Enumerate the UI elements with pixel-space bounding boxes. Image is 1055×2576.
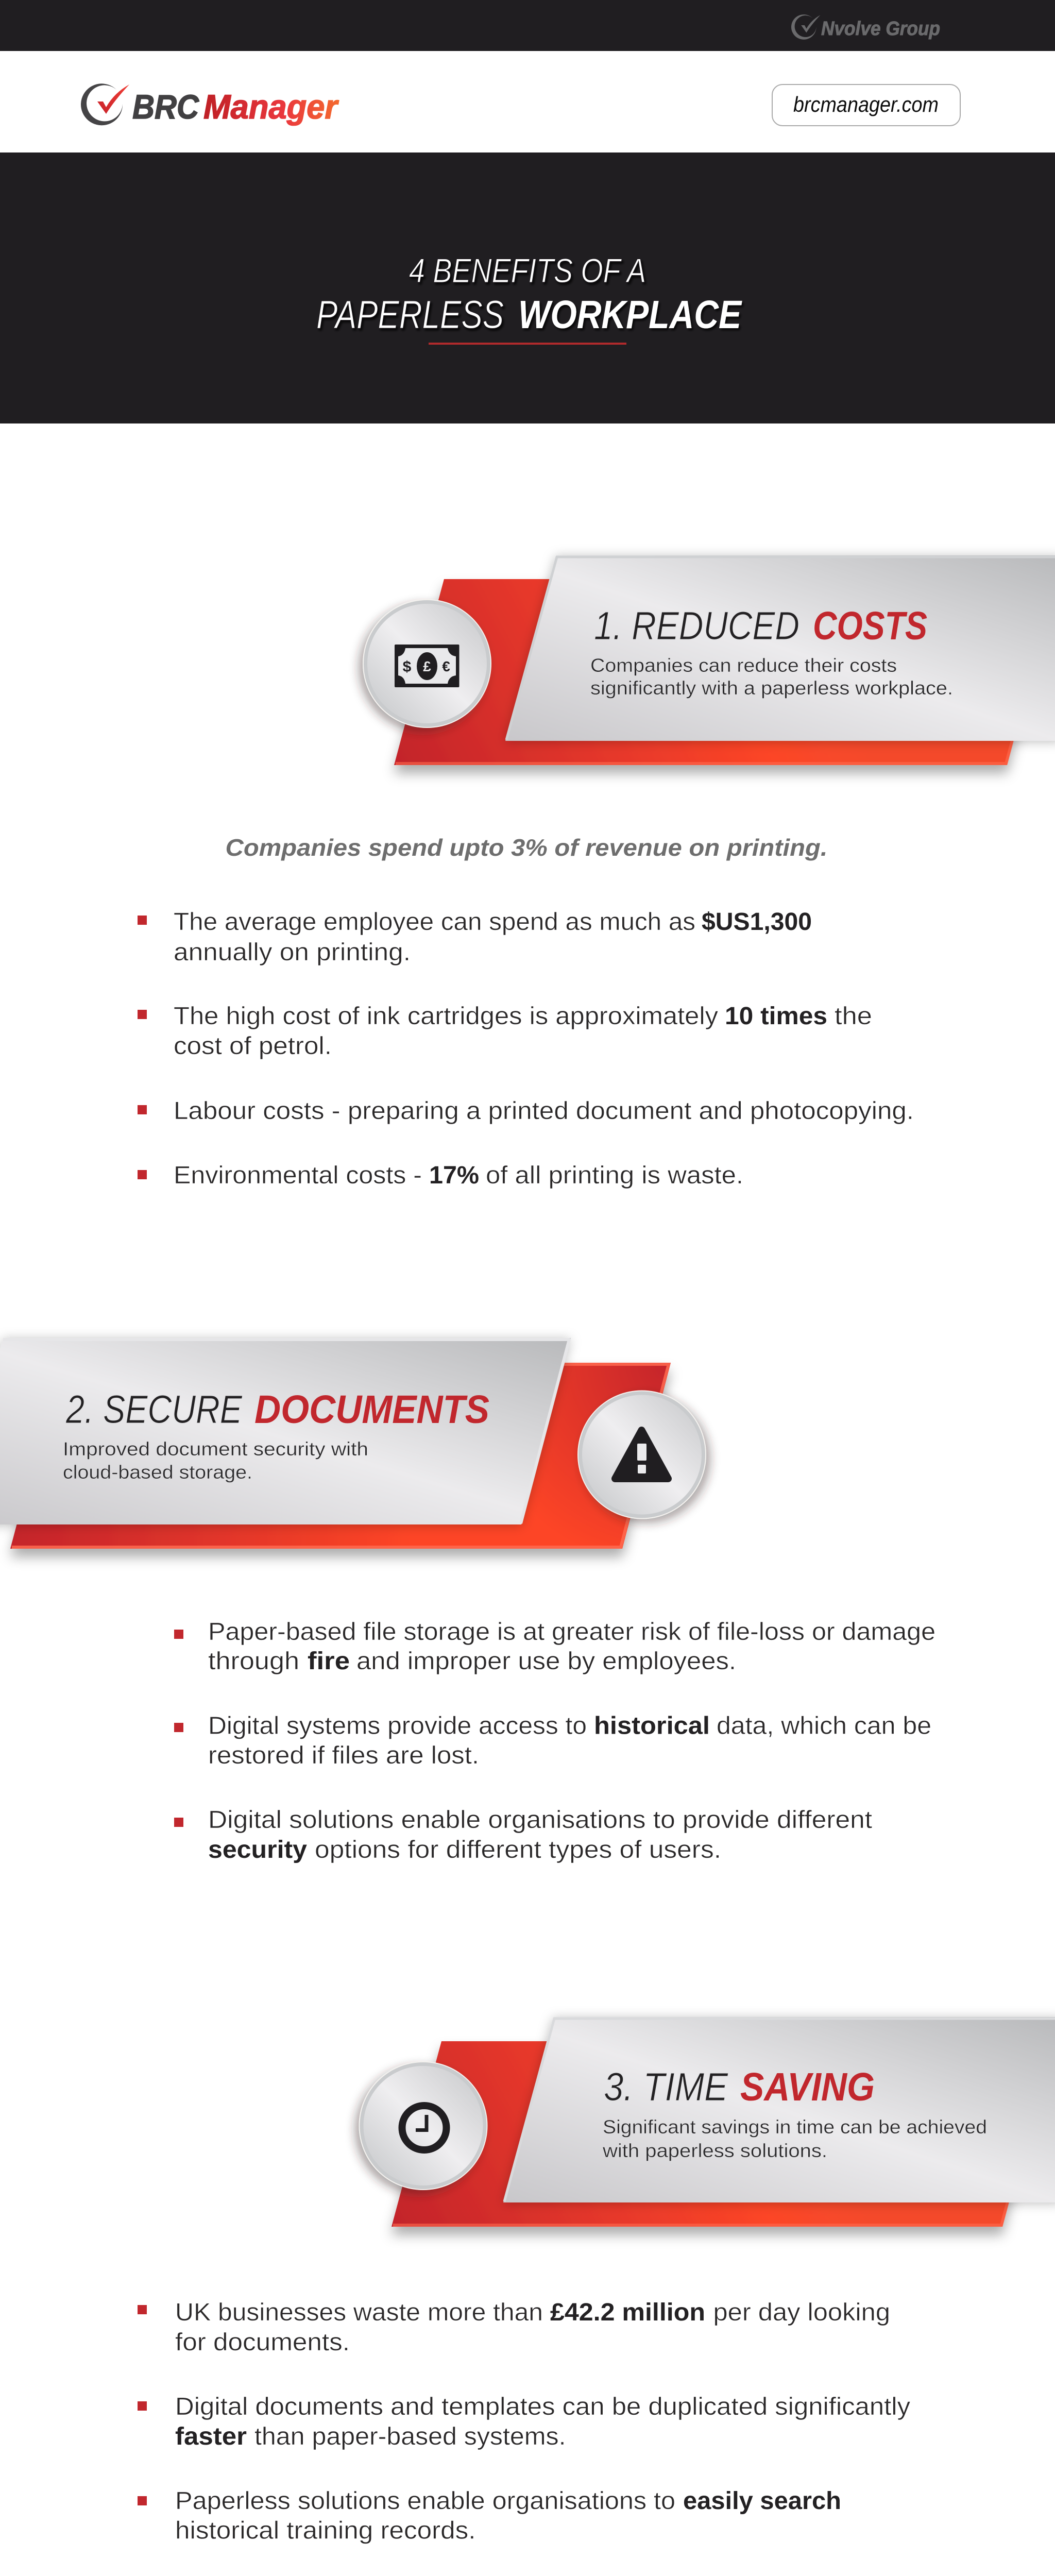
heading 3 (604, 2065, 875, 2109)
logo: BRC Manager: Manager (203, 88, 339, 126)
bullet list 3: than paper-based systems. (254, 2423, 566, 2450)
subtitle 1 (590, 655, 953, 699)
logo: BRC Manager: BRC (132, 88, 199, 126)
bullet list 3: easily search (683, 2487, 841, 2515)
bullet list 1 (138, 908, 914, 1189)
bullet list 1: of all printing is waste. (486, 1162, 743, 1189)
bullet list 1: 10 times (725, 1003, 827, 1030)
bullet list 3: Paperless solutions enable organisations to (175, 2487, 675, 2515)
logo: Nvolve Group: Nvolve Group (821, 18, 940, 40)
website button: brcmanager.com (793, 92, 939, 116)
icon: clock (359, 2061, 487, 2190)
subtitle 3: with paperless solutions. (602, 2140, 827, 2161)
banner 1 (394, 555, 1055, 765)
icon: banknote (363, 599, 491, 728)
section 3: time saving (138, 2017, 1055, 2544)
heading 2: 2. SECURE (65, 1387, 243, 1432)
icon: warning triangle (577, 1390, 706, 1519)
bullet list 1: Environmental costs - (174, 1162, 422, 1189)
bullet list 1: $US1,300 (702, 908, 812, 936)
bullet list 2: fire (308, 1648, 350, 1675)
logo: BRC Manager (81, 83, 339, 126)
bullet list 2: restored if files are lost. (208, 1742, 479, 1769)
bullet list 2: through (208, 1648, 299, 1675)
icon: banknote: $ (403, 658, 412, 675)
hero title: PAPERLESS (316, 293, 504, 337)
bullet list 3: historical training records. (175, 2517, 476, 2544)
heading 2 (65, 1387, 489, 1432)
bullet list 3: per day looking (713, 2299, 890, 2326)
icon: banknote: £ (423, 658, 431, 674)
bullet list 2: Paper-based file storage is at greater risk of file-loss or damage (208, 1618, 935, 1646)
top header bar (0, 0, 1055, 51)
bullet list 3: for documents. (175, 2329, 350, 2356)
banner 3 (392, 2017, 1055, 2227)
bullet list 3 (138, 2299, 910, 2544)
subtitle 1: Companies can reduce their costs (590, 655, 897, 676)
subtitle 3: Significant savings in time can be achieved (603, 2116, 987, 2138)
bullet list 1: 17% (429, 1162, 479, 1189)
bullet list 2: and improper use by employees. (356, 1648, 736, 1675)
bullet list 1: The average employee can spend as much as (174, 908, 695, 936)
bullet list 2: historical (594, 1713, 710, 1739)
bullet list 3: faster (175, 2423, 247, 2450)
heading 1: COSTS (813, 604, 927, 648)
bullet list 1: the (835, 1003, 872, 1030)
subtitle 2: Improved document security with (63, 1438, 368, 1460)
hero title: 4 BENEFITS OF A (409, 251, 646, 290)
subtitle 2: cloud-based storage. (63, 1462, 252, 1483)
bullet list 1: annually on printing. (174, 939, 411, 966)
icon: banknote: € (442, 658, 450, 674)
section 2: secure documents (0, 1338, 935, 1863)
callout statistic: Companies spend upto 3% of revenue on printing. (226, 834, 827, 861)
bullet list 2: security (208, 1836, 307, 1863)
hero panel (0, 152, 1055, 423)
bullet list 2 (174, 1618, 935, 1863)
subtitle 3 (602, 2116, 987, 2161)
bullet list 3: Digital documents and templates can be duplicated significantly (175, 2393, 910, 2420)
website button (772, 84, 960, 126)
bullet list 1: Labour costs - preparing a printed document and photocopying. (174, 1097, 914, 1125)
heading 2: DOCUMENTS (254, 1387, 489, 1432)
subtitle 2 (63, 1438, 368, 1483)
heading 3: SAVING (740, 2065, 875, 2109)
bullet list 2: options for different types of users. (315, 1836, 721, 1863)
bullet list 2: data, which can be (717, 1713, 931, 1739)
bullet list 3: £42.2 million (550, 2299, 705, 2326)
hero title: WORKPLACE (518, 293, 742, 337)
hero title (316, 251, 742, 337)
heading 1: 1. REDUCED (594, 604, 799, 648)
bullet list 1: The high cost of ink cartridges is approximately (174, 1003, 718, 1030)
subtitle 1: significantly with a paperless workplace. (590, 677, 953, 699)
logo: Nvolve Group (791, 14, 940, 40)
heading 3: 3. TIME (604, 2065, 728, 2109)
bullet list 1: cost of petrol. (174, 1032, 332, 1060)
bullet list 2: Digital solutions enable organisations to provide different (208, 1806, 872, 1834)
section 1: reduced costs (138, 555, 1055, 1189)
bullet list 3: UK businesses waste more than (175, 2299, 543, 2326)
bullet list 2: Digital systems provide access to (208, 1713, 587, 1739)
banner 2 (0, 1338, 671, 1549)
